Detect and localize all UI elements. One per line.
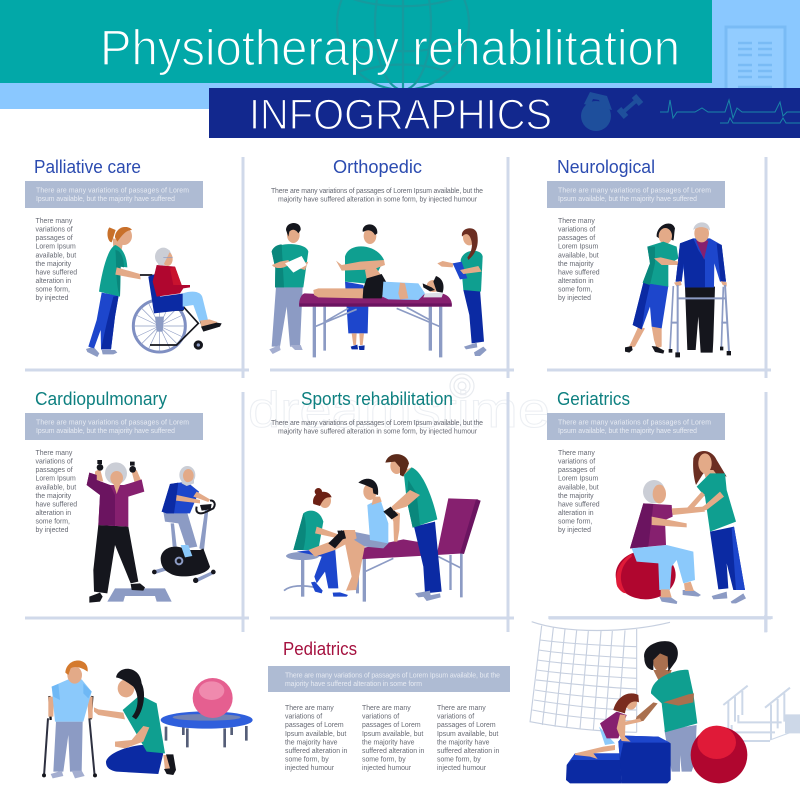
text column 1: injected humour: [285, 765, 335, 772]
text block: available, but: [36, 252, 76, 259]
text block: some form,: [36, 286, 70, 294]
red ball: [691, 726, 747, 783]
text column 2: passages of Lorem: [362, 722, 421, 729]
text block: alteration in: [558, 510, 594, 517]
patient: [308, 479, 400, 591]
text block: by injected: [36, 527, 69, 534]
summary bar: majority have suffered alteration in some form: [285, 681, 422, 688]
text column 2: There are many: [362, 705, 411, 712]
icon: heartbeat line: [660, 100, 800, 123]
text column 2: Ipsum available, but: [362, 731, 423, 738]
pink ball: [193, 678, 233, 718]
text column 2: some form, by: [362, 757, 406, 764]
left therapist: [269, 223, 308, 354]
patient: [630, 480, 705, 604]
summary bar: There are many variations of passages of Lorem Ipsum available, but the: [285, 672, 500, 680]
patient: [313, 267, 444, 300]
summary bar: There are many variations of passages of Lorem: [558, 188, 711, 194]
text block: some form,: [558, 286, 593, 294]
summary bar: There are many variations of passages of Lorem: [558, 420, 711, 426]
walker front: [671, 285, 729, 353]
summary bar: [25, 181, 203, 208]
text block: available, but: [36, 484, 76, 491]
heading: Neurological: [557, 157, 655, 177]
treatment table: [299, 293, 452, 357]
patient: [674, 222, 727, 353]
illustration: carer with man on walker: [625, 222, 731, 357]
illustration: therapists with patient on table: [284, 454, 481, 602]
illustration: treatment table with three people: [269, 223, 487, 357]
text block: some form,: [558, 518, 593, 526]
left therapist on stool: [284, 488, 348, 597]
text column 1: There are many: [285, 705, 334, 712]
summary bar: Ipsum available, but the majority have suffered: [558, 428, 697, 435]
heading: Palliative care: [34, 157, 141, 177]
text block: passages of: [558, 467, 595, 474]
description: majority have suffered alteration in some form, by injected humour: [278, 428, 478, 436]
text block: Lorem Ipsum: [558, 244, 598, 251]
text block: have suffered: [36, 269, 77, 276]
description: There are many variations of passages of Lorem Ipsum available, but the: [271, 420, 483, 427]
text block: variations of: [558, 459, 595, 466]
summary bar: There are many variations of passages of Lorem: [36, 420, 189, 426]
carer arm: [654, 257, 678, 265]
text column 2: variations of: [362, 714, 399, 721]
middle therapist: [336, 224, 385, 350]
table: [356, 498, 481, 602]
panel: neurological: [547, 157, 771, 378]
child: [575, 693, 642, 759]
man on exercise bike: [152, 466, 216, 583]
header banner: [0, 0, 800, 139]
description: majority have suffered alteration in some form, by injected humour: [278, 196, 478, 204]
panel: cardiopulmonary: [25, 389, 249, 632]
summary bar: Ipsum available, but the majority have suffered: [36, 196, 175, 203]
text block: alteration in: [36, 510, 71, 517]
summary bar: Ipsum available, but the majority have suffered: [36, 428, 175, 435]
text block: There many: [36, 450, 73, 457]
carer: [625, 223, 678, 354]
text column 1: the majority have: [285, 739, 338, 746]
text block: There many: [558, 218, 595, 225]
text block: the majority: [36, 261, 72, 268]
text block: the majority: [558, 261, 594, 268]
title: Physiotherapy rehabilitation: [100, 20, 680, 76]
watermark: dreamstime: [248, 382, 550, 438]
icon: dumbbell: [619, 96, 641, 117]
text column 3: the majority have: [437, 739, 490, 746]
illustration: boy on crutches, therapist and trampoline: [42, 661, 253, 778]
text column 2: the majority have: [362, 739, 415, 746]
text block: alteration in: [36, 278, 71, 285]
heading: Orthopedic: [333, 157, 422, 177]
right therapist: [385, 454, 442, 601]
soft blocks: [566, 736, 671, 783]
subtitle: INFOGRAPHICS: [249, 91, 552, 139]
heading: Geriatrics: [557, 389, 630, 409]
text block: the majority: [558, 493, 594, 500]
text block: Lorem Ipsum: [558, 476, 598, 483]
illustration: woman lifting weights: [87, 460, 216, 603]
heading: Sports rehabilitation: [301, 389, 453, 409]
text column 1: passages of Lorem: [285, 722, 344, 729]
heading: Cardiopulmonary: [35, 389, 167, 409]
summary bar: [268, 666, 510, 692]
text block: by injected: [558, 295, 591, 302]
text column 3: There are many: [437, 705, 486, 712]
text block: passages of: [558, 235, 595, 242]
illustration: nurse pushing wheelchair: [86, 227, 222, 357]
illustration: woman on exercise ball with therapist: [616, 451, 746, 604]
text block: by injected: [36, 295, 69, 302]
text block: passages of: [36, 235, 73, 242]
panel: pediatrics: [42, 639, 510, 778]
text block: variations of: [36, 459, 73, 466]
therapist: [687, 451, 746, 603]
panel: orthopedic: [269, 157, 514, 378]
text block: There many: [36, 218, 73, 225]
right therapist: [437, 228, 487, 356]
icon: globe: [337, 0, 469, 90]
text block: have suffered: [558, 269, 600, 276]
text block: available, but: [558, 484, 599, 491]
icon: document: [726, 27, 785, 97]
text column 3: some form, by: [437, 757, 481, 764]
climbing net: [530, 622, 670, 732]
text block: variations of: [558, 227, 595, 234]
text column 1: suffered alteration in: [285, 748, 347, 755]
text column 2: injected humour: [362, 765, 412, 772]
summary bar: Ipsum available, but the majority have suffered: [558, 196, 697, 203]
summary bar: [547, 181, 725, 208]
text block: have suffered: [558, 501, 600, 508]
text block: the majority: [36, 493, 72, 500]
text column 3: Ipsum available, but: [437, 731, 498, 738]
boy: [42, 661, 97, 778]
text block: have suffered: [36, 501, 77, 508]
text column 3: passages of Lorem: [437, 722, 496, 729]
illustration: therapist with child at soft blocks: [530, 615, 800, 783]
text column 1: Ipsum available, but: [285, 731, 346, 738]
panel: palliative care: [25, 157, 249, 378]
summary bar: [25, 413, 203, 440]
panel: geriatrics: [547, 389, 771, 632]
text block: by injected: [558, 527, 591, 534]
text block: Lorem Ipsum: [36, 244, 76, 251]
text column 3: variations of: [437, 714, 474, 721]
text block: alteration in: [558, 278, 594, 285]
summary bar: There are many variations of passages of Lorem: [36, 188, 189, 194]
text block: some form,: [36, 518, 70, 526]
summary bar: [547, 413, 725, 440]
therapist: [635, 641, 697, 772]
exercise ball: [616, 551, 676, 599]
text column 3: suffered alteration in: [437, 748, 499, 755]
icon: kettlebell: [581, 92, 612, 131]
text column 1: some form, by: [285, 757, 329, 764]
text block: There many: [558, 450, 595, 457]
text block: variations of: [36, 227, 73, 234]
walker rear: [670, 286, 723, 350]
text block: available, but: [558, 252, 599, 259]
description: There are many variations of passages of Lorem Ipsum available, but the: [271, 188, 483, 195]
trampoline: [161, 711, 253, 747]
staircase: [723, 686, 800, 741]
text block: passages of: [36, 467, 73, 474]
heading: Pediatrics: [283, 639, 357, 659]
text column 2: suffered alteration in: [362, 748, 424, 755]
panel: sports rehabilitation: [270, 389, 514, 632]
text column 3: injected humour: [437, 765, 487, 772]
text block: Lorem Ipsum: [36, 476, 76, 483]
kneeling therapist: [94, 669, 176, 775]
text column 1: variations of: [285, 714, 322, 721]
